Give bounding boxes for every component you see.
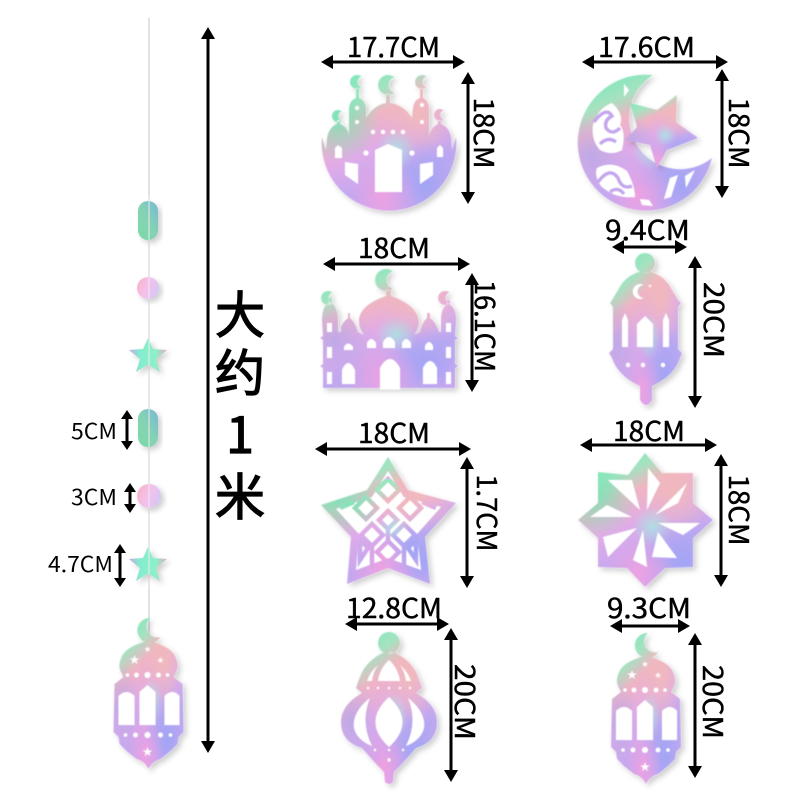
dimension: 9.4CM width label: 9.4CM	[605, 209, 690, 248]
dimension: 18CM width label: 18CM	[358, 227, 430, 266]
arrow: 9.4CM	[612, 240, 687, 254]
bead: circle 1	[137, 277, 159, 299]
icon: round mosque	[322, 75, 456, 211]
arrow: 18CM	[714, 454, 728, 587]
dimension: 20CM height label: 20CM	[447, 664, 486, 740]
icon: crescent-top lantern	[611, 633, 681, 784]
arrow: 20CM	[688, 633, 702, 778]
arrow: 1.7CM	[460, 457, 474, 588]
vertical heading: 米	[215, 458, 265, 530]
arrow: 18CM	[323, 257, 470, 271]
bead: pill 1	[138, 201, 158, 240]
icon: mosque with towers	[320, 269, 458, 389]
dimension: 18CM height label: 18CM	[466, 98, 505, 168]
dimension: 20CM height label: 20CM	[696, 282, 735, 358]
icon: oval lantern	[609, 253, 682, 405]
arrow: 20CM	[688, 256, 702, 408]
icon: hanging lantern	[114, 618, 184, 769]
arrow: 18CM	[580, 438, 717, 452]
arrow: 20CM	[444, 628, 458, 782]
arrow: 5CM	[121, 410, 133, 450]
arrow: 18CM	[461, 72, 475, 204]
dimension: 17.6CM width label: 17.6CM	[598, 26, 695, 65]
dimension: 1.7CM height label: 1.7CM	[469, 474, 508, 552]
hanging string	[148, 18, 150, 643]
bead: circle 2	[137, 484, 161, 508]
label: 3CM: 3CM	[71, 480, 117, 512]
arrow: 18CM	[315, 442, 471, 456]
icon: lattice star	[321, 457, 456, 584]
label: 4.7CM: 4.7CM	[48, 547, 113, 579]
arrow: 16.1CM	[465, 273, 479, 392]
arrow: 17.7CM	[321, 55, 465, 69]
dimension: 18CM height label: 18CM	[721, 98, 760, 168]
arrow: total length	[201, 27, 215, 753]
bead: star 2	[129, 547, 167, 581]
arrow: 9.3CM	[610, 619, 690, 633]
dimension: 18CM height label: 18CM	[721, 474, 760, 546]
vertical heading: 约	[215, 334, 265, 406]
vertical heading	[215, 276, 265, 530]
arrow: 18CM	[715, 69, 729, 198]
dimension: 17.7CM width label: 17.7CM	[347, 26, 440, 65]
label: 5CM: 5CM	[71, 414, 117, 446]
bead: star 1	[129, 338, 167, 372]
string over beads	[148, 195, 150, 590]
bead: pill 2	[138, 409, 158, 447]
dimension: 16.1CM height label: 16.1CM	[467, 280, 506, 372]
dimension: 18CM width label: 18CM	[358, 412, 430, 451]
icon: crescent and star	[578, 75, 712, 211]
icon: eight-point star	[578, 453, 713, 587]
dimension: 20CM height label: 20CM	[695, 665, 734, 739]
arrow: 12.8CM	[345, 617, 449, 631]
arrow: 3CM	[124, 483, 136, 513]
icon: bulb lantern	[341, 632, 437, 784]
arrow: 4.7CM	[114, 544, 126, 587]
vertical heading: 大	[215, 276, 265, 348]
vertical heading: 1	[226, 396, 254, 468]
dimension: 18CM width label: 18CM	[613, 410, 685, 449]
arrow: 17.6CM	[582, 55, 728, 69]
dimension: 9.3CM width label: 9.3CM	[607, 587, 691, 626]
dimension: 12.8CM width label: 12.8CM	[346, 587, 442, 626]
